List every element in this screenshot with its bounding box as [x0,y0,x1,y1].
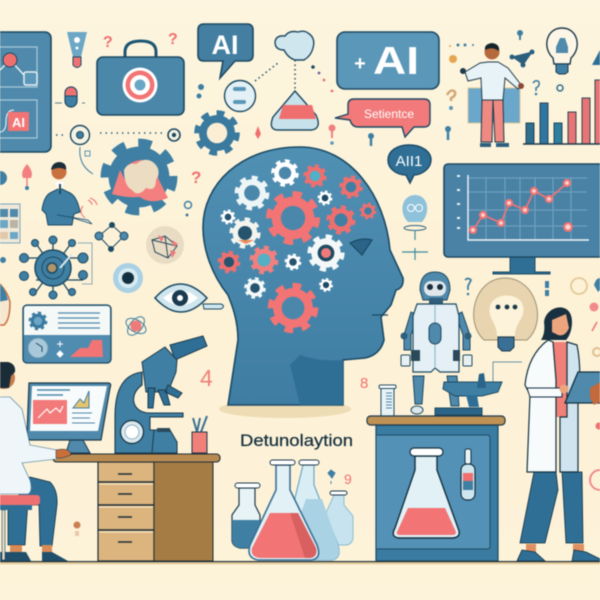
robot legs [413,376,424,404]
icon: connected nodes [510,50,534,67]
floor line [0,561,600,564]
label: number 8: 8 [360,375,368,392]
icons: right edge fragments [590,302,600,490]
desk with drawers [53,454,220,561]
panel: AI diagram tablet: AI [12,115,25,130]
icon: pencil cup [192,416,207,453]
icon: funnel tube [67,32,87,68]
icon: anvil instrument [435,362,522,415]
speech bubble: AI [198,24,253,78]
label: question and 9: 9 [344,471,352,487]
icon: pink question marks: ? [168,31,178,48]
person: seated scientist [0,362,71,561]
icon: virus hub [20,236,92,299]
icon: small blue lightbulb [402,195,428,260]
robot arms [404,312,418,350]
main head with gears [203,147,403,418]
icon: capsule [55,87,85,107]
person fragment at left edge [0,282,10,325]
monitor: line chart [444,164,600,274]
robot torso [413,304,459,372]
icon: cream gear [197,113,237,153]
icon: network circle [146,226,184,264]
icon: briefcase with target [97,41,184,115]
callout: +AI: AI [373,40,419,83]
icon: target nodes connection [56,126,180,174]
cabinet with flask [367,416,505,561]
icons: marks beside bulb [465,278,600,296]
head shadow [219,400,351,418]
callout: science speech bubble: Setientce [364,107,414,121]
icon: atom [123,314,149,338]
icon: floor dot [74,522,80,536]
head silhouette [203,147,403,405]
icons: small marks near chart [533,81,563,95]
person: scientist with pointer [449,43,524,147]
facial features [350,239,388,315]
speech bubble: AI: AI [212,30,238,60]
microscope [115,336,207,453]
label: question and 9 [328,470,352,487]
chart line [473,183,567,230]
icon: pink question marks [103,31,201,187]
panel: dashboard [23,305,111,363]
front pink flask [249,460,319,560]
label: number 4: 4 [200,365,213,391]
speech bubble: AII1 [388,145,431,183]
icon: eye [155,284,224,312]
icon: pink question marks: ? [191,168,201,187]
flasks group [232,460,353,560]
icon: pink drop pin [22,164,32,190]
person: woman scientist with tablet [517,307,600,561]
icon: cloud and flask connection [255,31,333,130]
icon: test tube [379,385,396,416]
icon: sparkle [255,126,261,139]
person: presenter in suit [42,162,97,225]
icon: top lightbulb [547,28,600,74]
computer monitor on desk [27,383,111,453]
vial on cabinet [461,464,475,500]
icon: large gear with brain blob [105,143,173,211]
callout: +AI: + [354,53,366,75]
icons: small pins [328,30,523,146]
heading: Detunolaytion: Detunolaytion [240,432,353,450]
panel: small table [0,204,20,243]
robot head [420,272,450,300]
gears inside head [219,161,375,330]
back blue flask [280,460,339,560]
right small flask [325,491,353,545]
bar chart: top right [523,80,600,144]
icon: iris [113,263,143,293]
icon: pink question marks: ? [103,34,113,51]
chart grid [468,177,587,240]
small left flask [232,483,260,548]
icon: small blue marks [0,84,204,263]
callout: science speech bubble [335,99,430,137]
panel: AI diagram tablet [0,32,51,152]
icon: pill circle [224,80,256,112]
speech bubble: AII1: AII1 [396,153,422,170]
icon: molecule diamond [95,222,128,252]
neck shading [290,355,343,405]
robot body [400,298,472,414]
flask on cabinet [393,456,459,538]
icon: big lightbulb [474,278,538,351]
callout: +AI [337,32,439,89]
